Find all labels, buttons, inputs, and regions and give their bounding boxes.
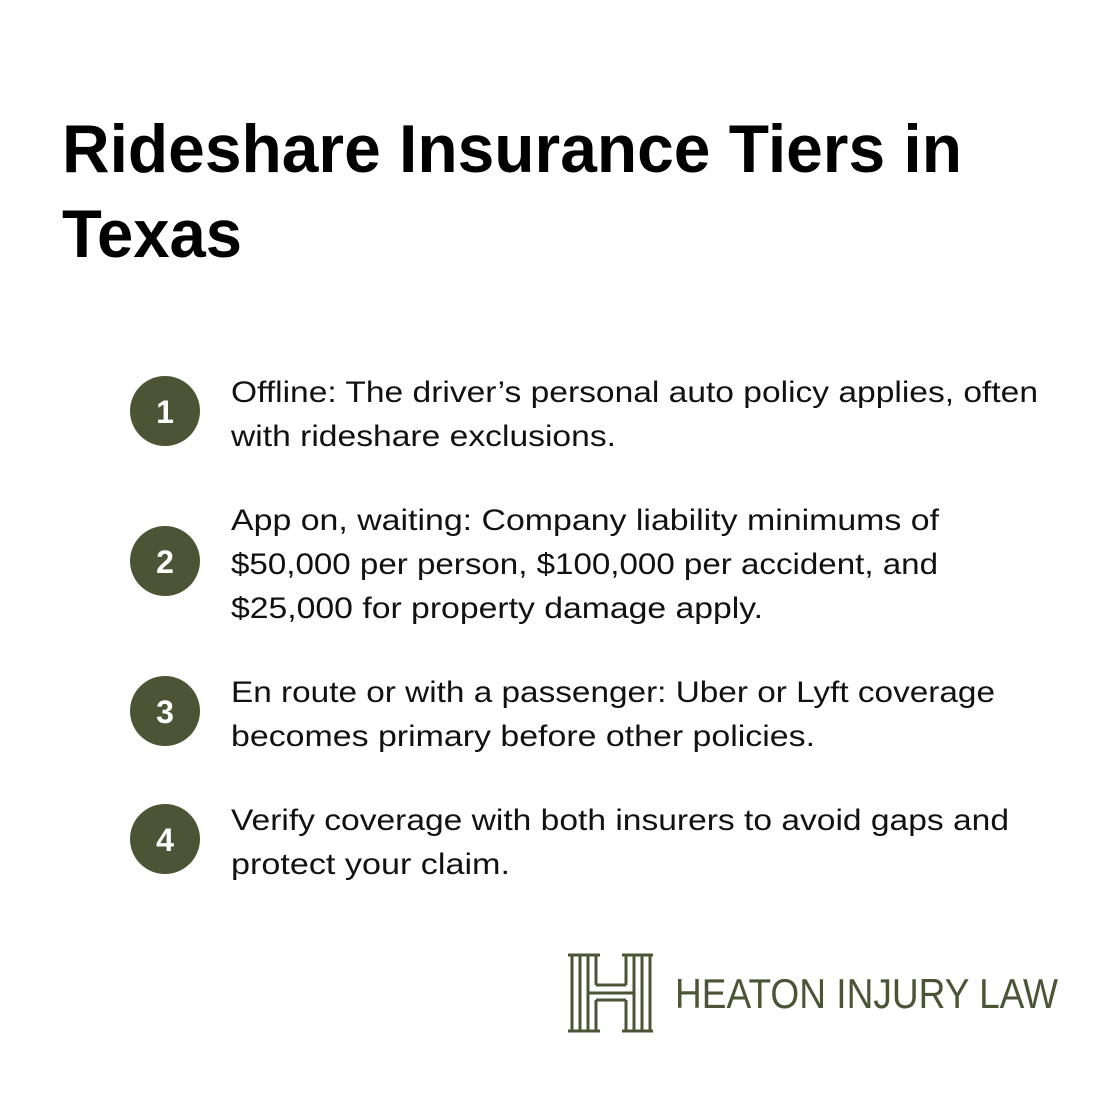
text 3: becomes primary before other policies. <box>231 720 815 753</box>
logo mark <box>568 955 653 1031</box>
number badge 3 <box>130 676 200 746</box>
text 4 <box>231 804 1009 881</box>
logo text: HEATON INJURY LAW <box>675 970 1058 1017</box>
item 3 <box>130 676 995 753</box>
text 3 <box>231 676 995 753</box>
title: Texas <box>62 196 242 272</box>
number badge 3: 3 <box>156 694 174 730</box>
number badge 4: 4 <box>156 822 174 858</box>
number badge 4 <box>130 804 200 874</box>
number badge 2 <box>130 526 200 596</box>
number badge 2: 2 <box>156 544 174 580</box>
text 1: Offline: The driver’s personal auto policy applies, often <box>231 376 1038 409</box>
text 2: $50,000 per person, $100,000 per accident, and <box>231 548 938 581</box>
text 2: $25,000 for property damage apply. <box>231 592 763 625</box>
number badge 1 <box>130 376 200 446</box>
text 4: Verify coverage with both insurers to avoid gaps and <box>231 804 1009 837</box>
text 1: with rideshare exclusions. <box>230 420 616 453</box>
title <box>62 111 962 272</box>
item 4 <box>130 804 1009 881</box>
text 2: App on, waiting: Company liability minimums of <box>231 504 940 537</box>
text 3: En route or with a passenger: Uber or Lyft coverage <box>231 676 995 709</box>
item 1 <box>130 376 1038 453</box>
text 4: protect your claim. <box>231 848 510 881</box>
text 2 <box>231 504 940 625</box>
item 2 <box>130 504 940 625</box>
logo <box>568 955 1058 1031</box>
title: Rideshare Insurance Tiers in <box>62 111 962 187</box>
text 1 <box>230 376 1038 453</box>
number badge 1: 1 <box>156 394 174 430</box>
